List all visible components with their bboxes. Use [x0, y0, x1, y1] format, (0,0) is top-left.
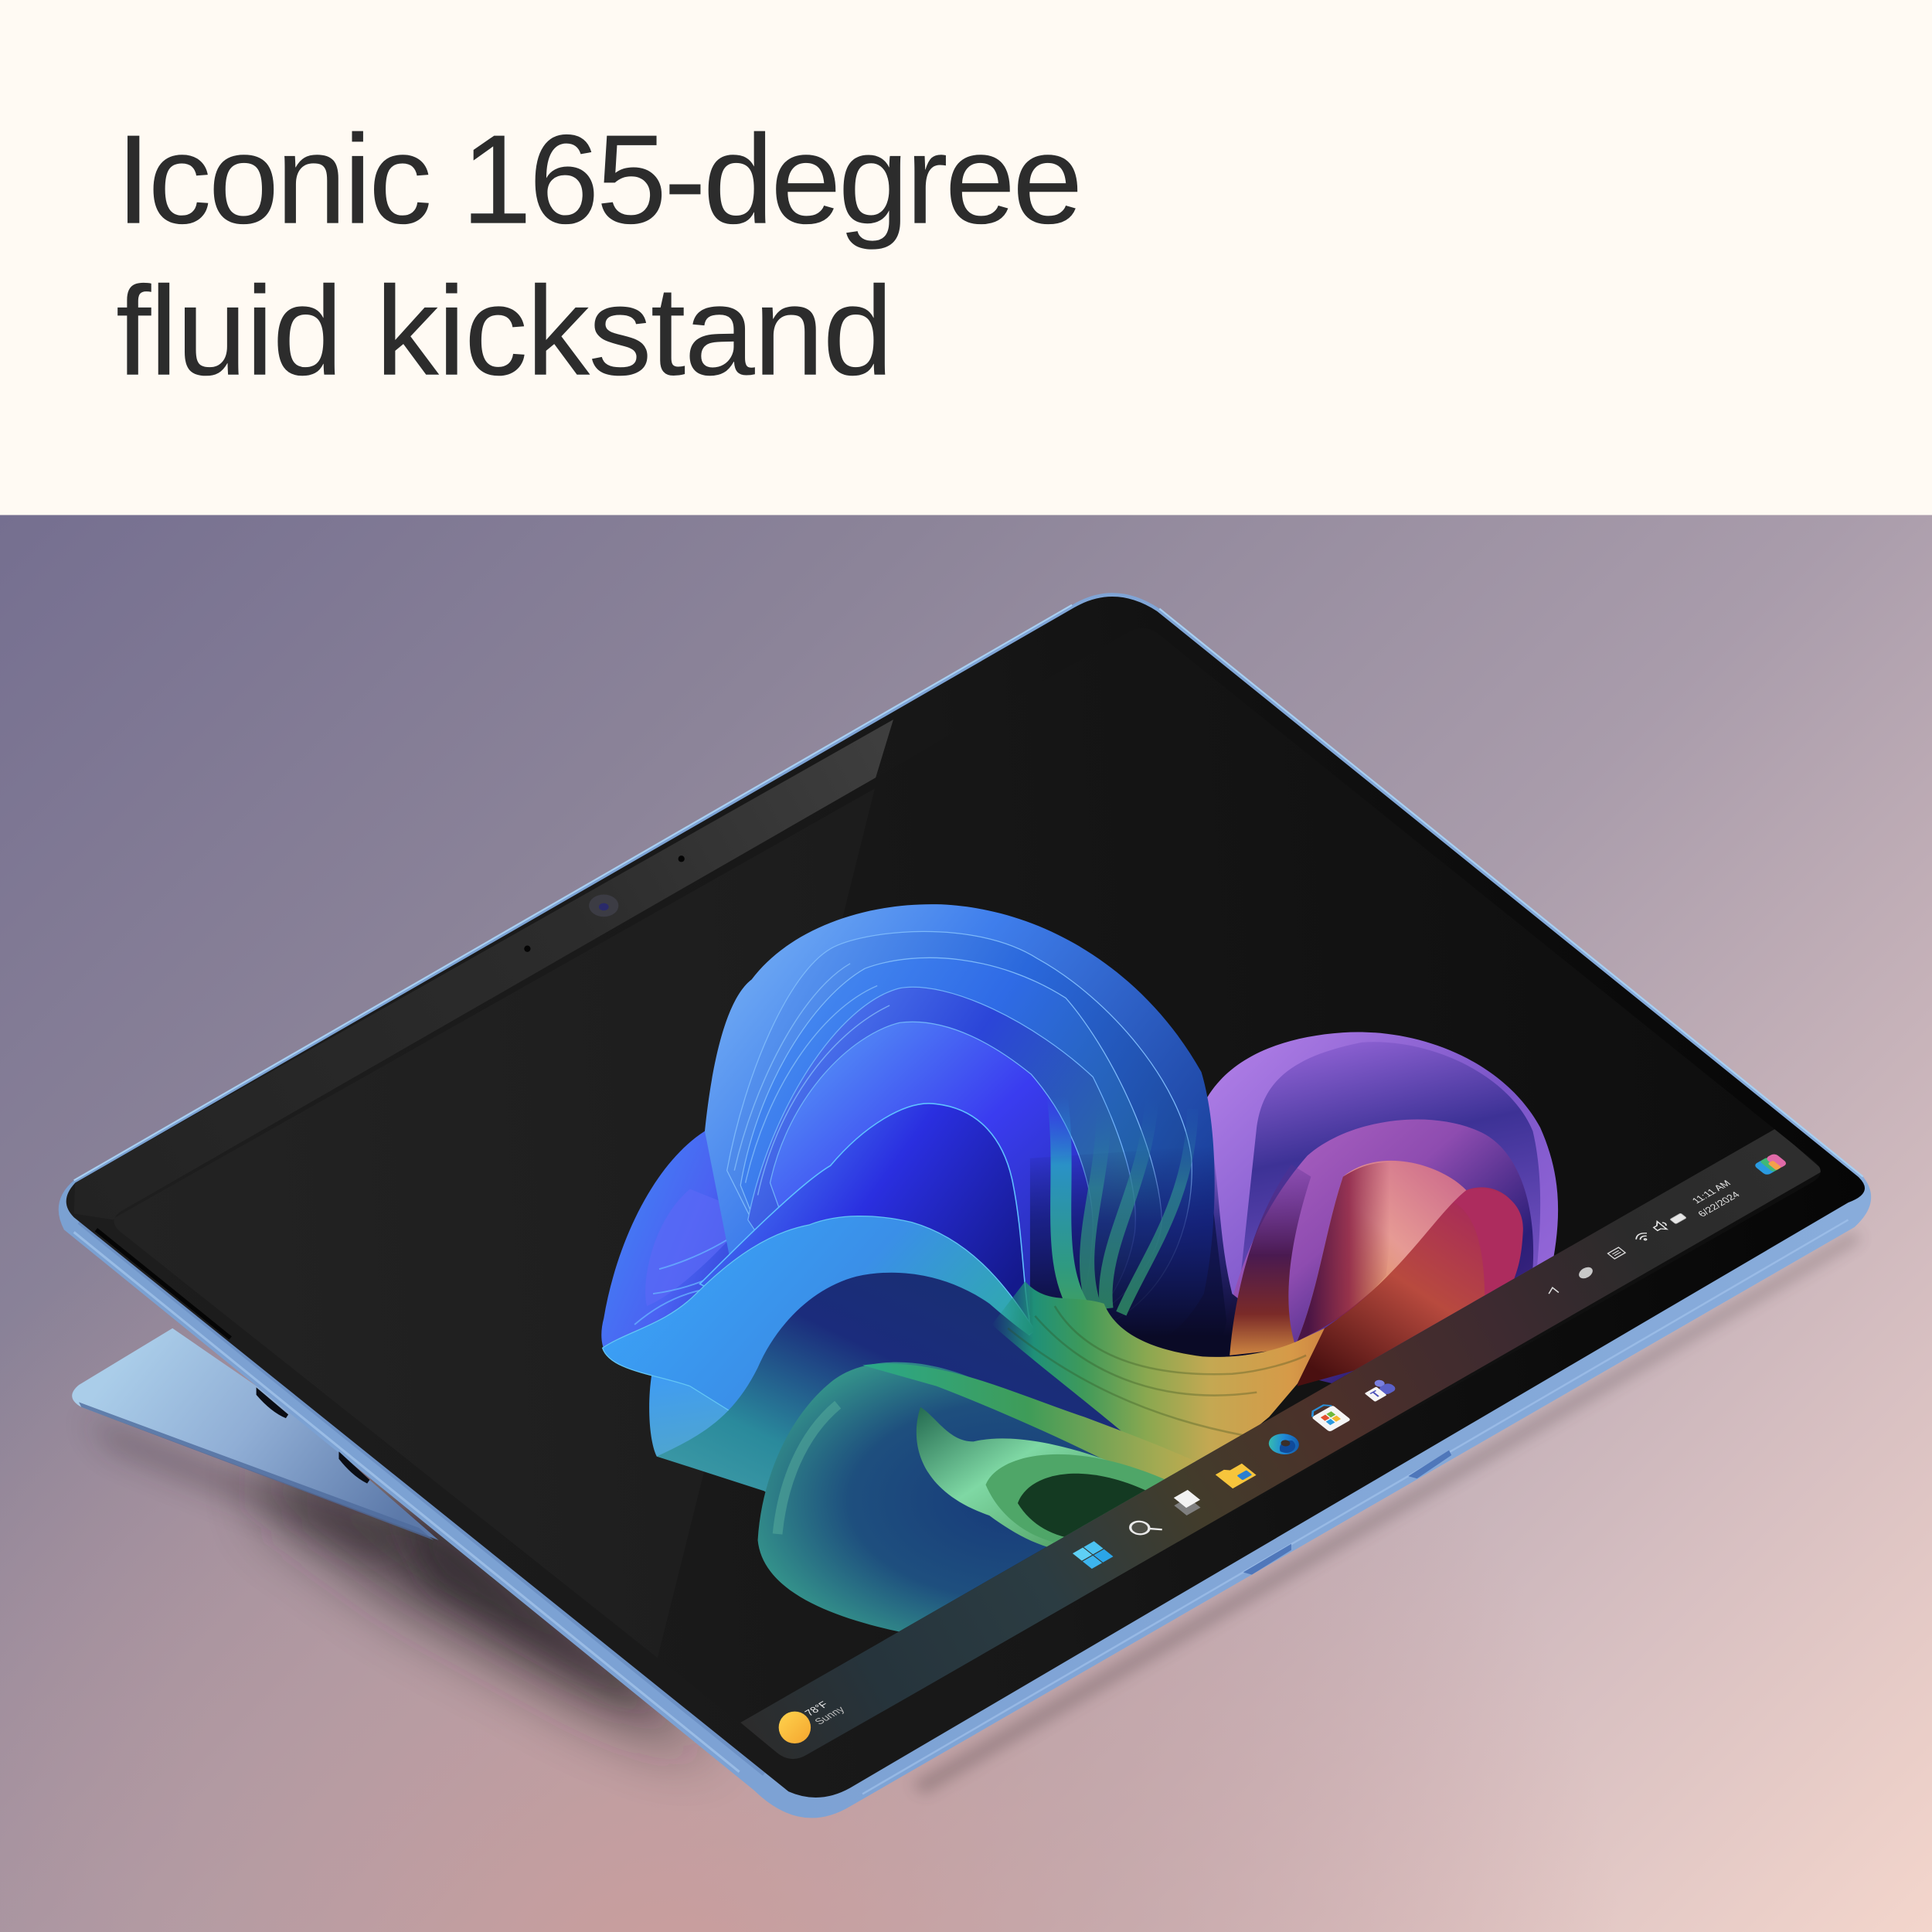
purple petal — [1202, 1032, 1558, 1393]
icon: file explorer — [1216, 1461, 1257, 1488]
icon: store — [1308, 1402, 1351, 1432]
title: Iconic 165-degree — [116, 108, 1083, 250]
navy and teal fold — [657, 1272, 1229, 1492]
clock: 6/22/2024 — [1695, 1189, 1742, 1219]
dark red pleats — [1230, 1165, 1311, 1355]
icon: task view — [1168, 1490, 1206, 1515]
green inner fold — [917, 1407, 1189, 1553]
tablet frame — [59, 593, 1871, 1818]
camera and sensors — [524, 855, 685, 952]
title: fluid kickstand — [116, 260, 893, 402]
folded stripes right of hump — [1057, 1097, 1192, 1318]
icon: copilot — [1753, 1153, 1788, 1176]
teal front lobe — [758, 1362, 1232, 1639]
icon: teams — [1360, 1377, 1397, 1402]
weather widget: 78°F — [802, 1699, 831, 1718]
icon: teams: T — [1369, 1389, 1384, 1400]
kickstand — [72, 1328, 439, 1540]
top bezel reflection — [74, 719, 893, 1219]
gradient backdrop — [0, 515, 1932, 1932]
taskbar — [740, 1128, 1824, 1764]
display — [213, 777, 1821, 1759]
weather widget — [779, 1699, 847, 1743]
icon: search — [1127, 1516, 1162, 1540]
system tray icons — [1549, 1213, 1686, 1294]
lower blue flap — [649, 1376, 728, 1459]
left side ports — [257, 1387, 369, 1484]
left blue lobe — [601, 1131, 730, 1347]
glass front — [66, 597, 1865, 1798]
header panel — [0, 0, 1932, 515]
light blue wave — [601, 1216, 1032, 1411]
lower edge ports — [1243, 1451, 1451, 1575]
rainbow ribbons — [992, 1281, 1325, 1485]
clock: 11:11 AM — [1689, 1179, 1733, 1206]
dark gap behind ribbons — [1029, 1151, 1267, 1357]
wallpaper bloom — [601, 904, 1558, 1639]
weather widget: Sunny — [812, 1704, 847, 1726]
clock — [1689, 1179, 1742, 1219]
dark slit by kickstand hinge — [96, 1230, 230, 1338]
icon: windows start — [1073, 1541, 1114, 1569]
icon: edge browser — [1263, 1430, 1305, 1458]
front deep-blue hump — [700, 1104, 1030, 1331]
pink fold and red inner fold — [1294, 1161, 1523, 1386]
main blue petal — [705, 904, 1215, 1355]
title — [116, 108, 1083, 402]
tablet shadow on surface — [87, 1232, 1861, 1794]
